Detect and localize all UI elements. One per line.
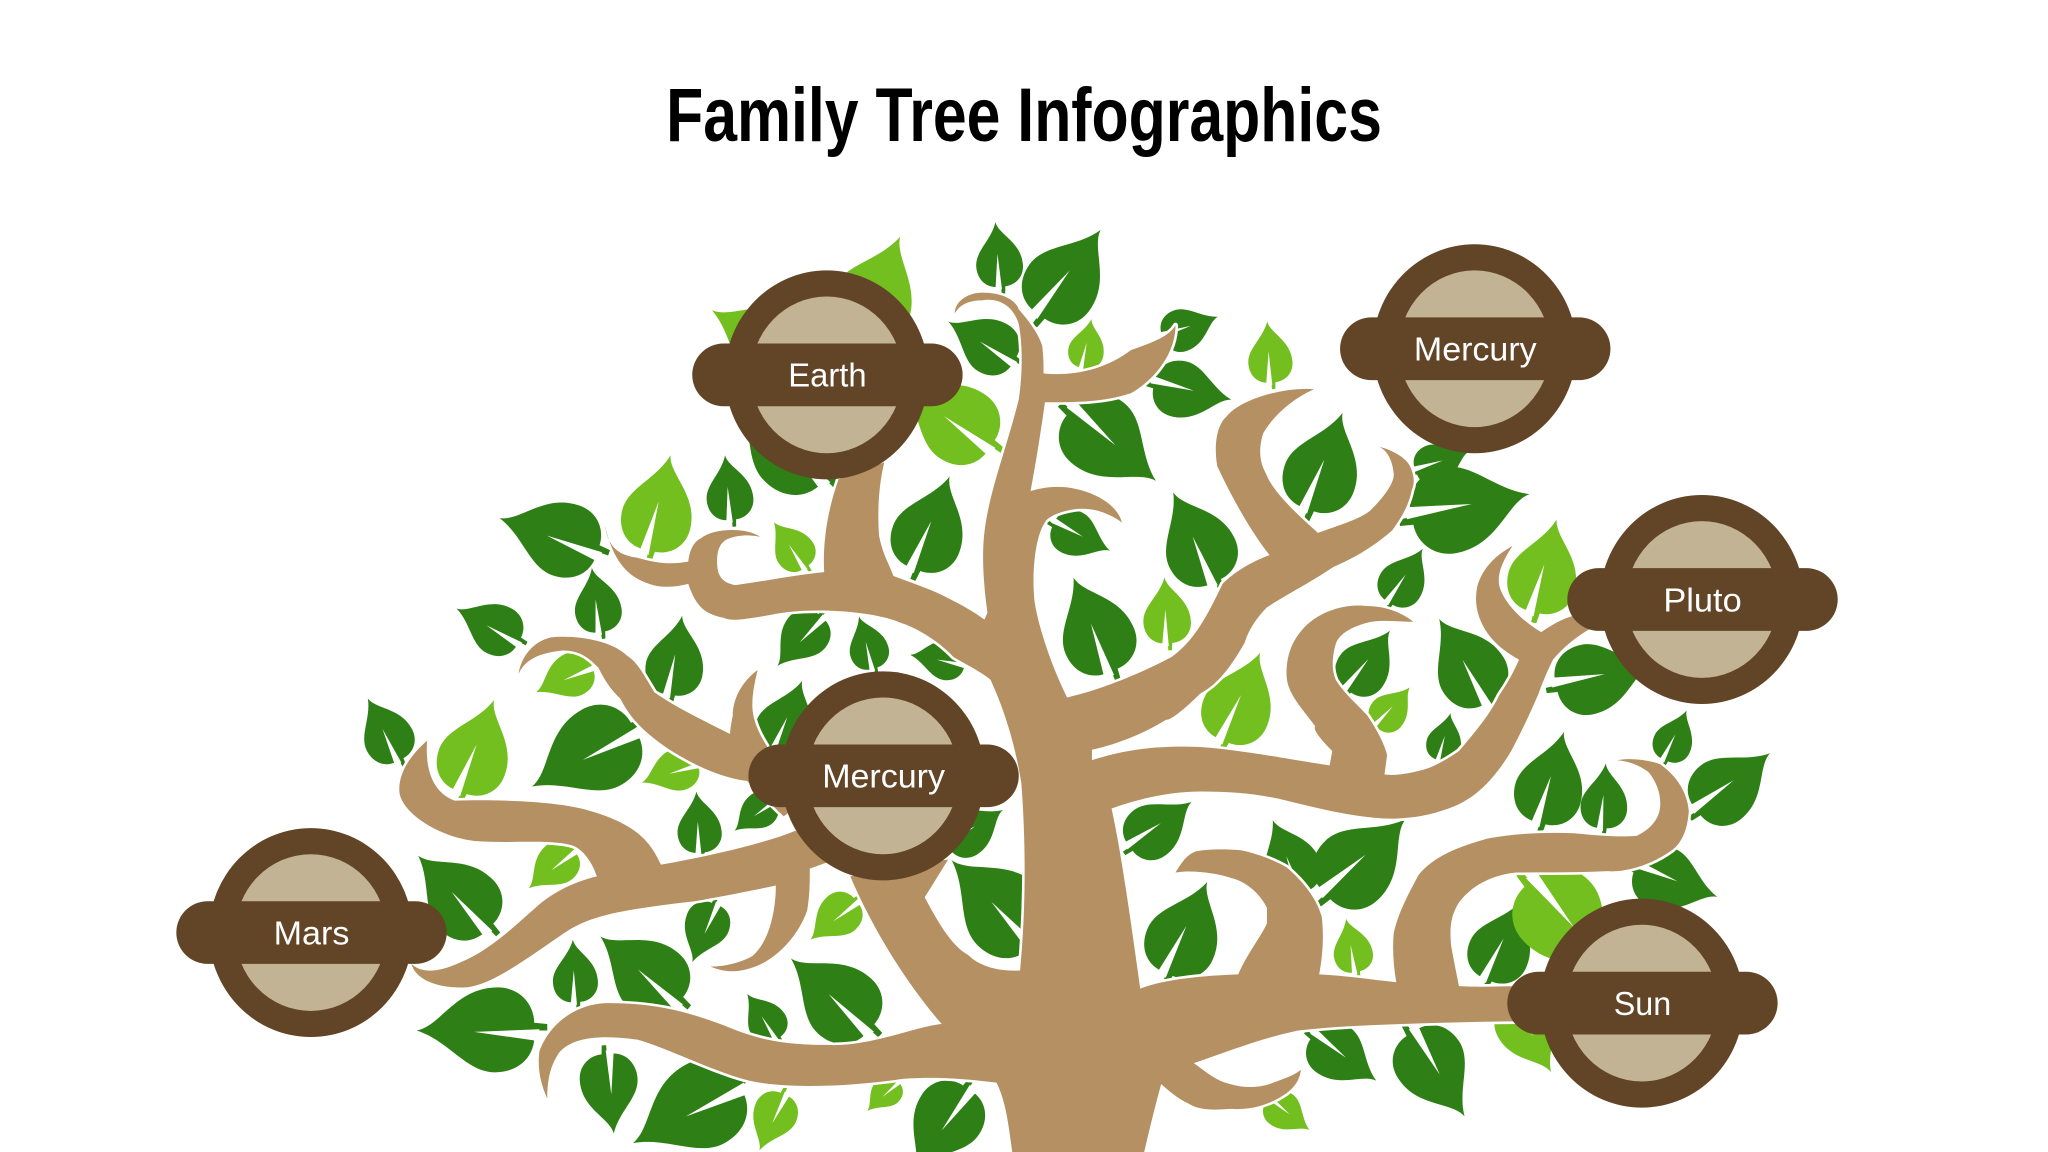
badge: Sun [1507, 899, 1778, 1108]
tree trunk and branches [399, 293, 1689, 1152]
badge: Mars [176, 828, 447, 1037]
branch: to Mars [399, 741, 828, 988]
badge: Mars: Mars [274, 915, 349, 952]
badge: Mercury top right [1340, 244, 1610, 453]
tree halo: white outline behind the branches [399, 293, 1689, 1152]
badge: Mercury top right: Mercury [1414, 331, 1537, 368]
branch: to central Mercury badge [519, 637, 810, 816]
leaves: dark green foliage [346, 208, 1791, 1152]
leaves: light green foliage [424, 220, 1646, 1152]
branch: lower left [539, 1003, 1045, 1098]
title: Family Tree Infographics [666, 73, 1382, 158]
badge: Pluto [1567, 495, 1838, 704]
badge: Earth [692, 270, 963, 479]
badge: Mercury centre [748, 671, 1019, 880]
main trunk and central stalk [850, 293, 1689, 1152]
badge: Pluto: Pluto [1663, 582, 1742, 619]
badge: Sun: Sun [1614, 986, 1671, 1023]
branch: to Earth badge [605, 462, 1045, 731]
badge: Earth: Earth [788, 358, 867, 395]
badge: Mercury centre: Mercury [822, 759, 945, 796]
